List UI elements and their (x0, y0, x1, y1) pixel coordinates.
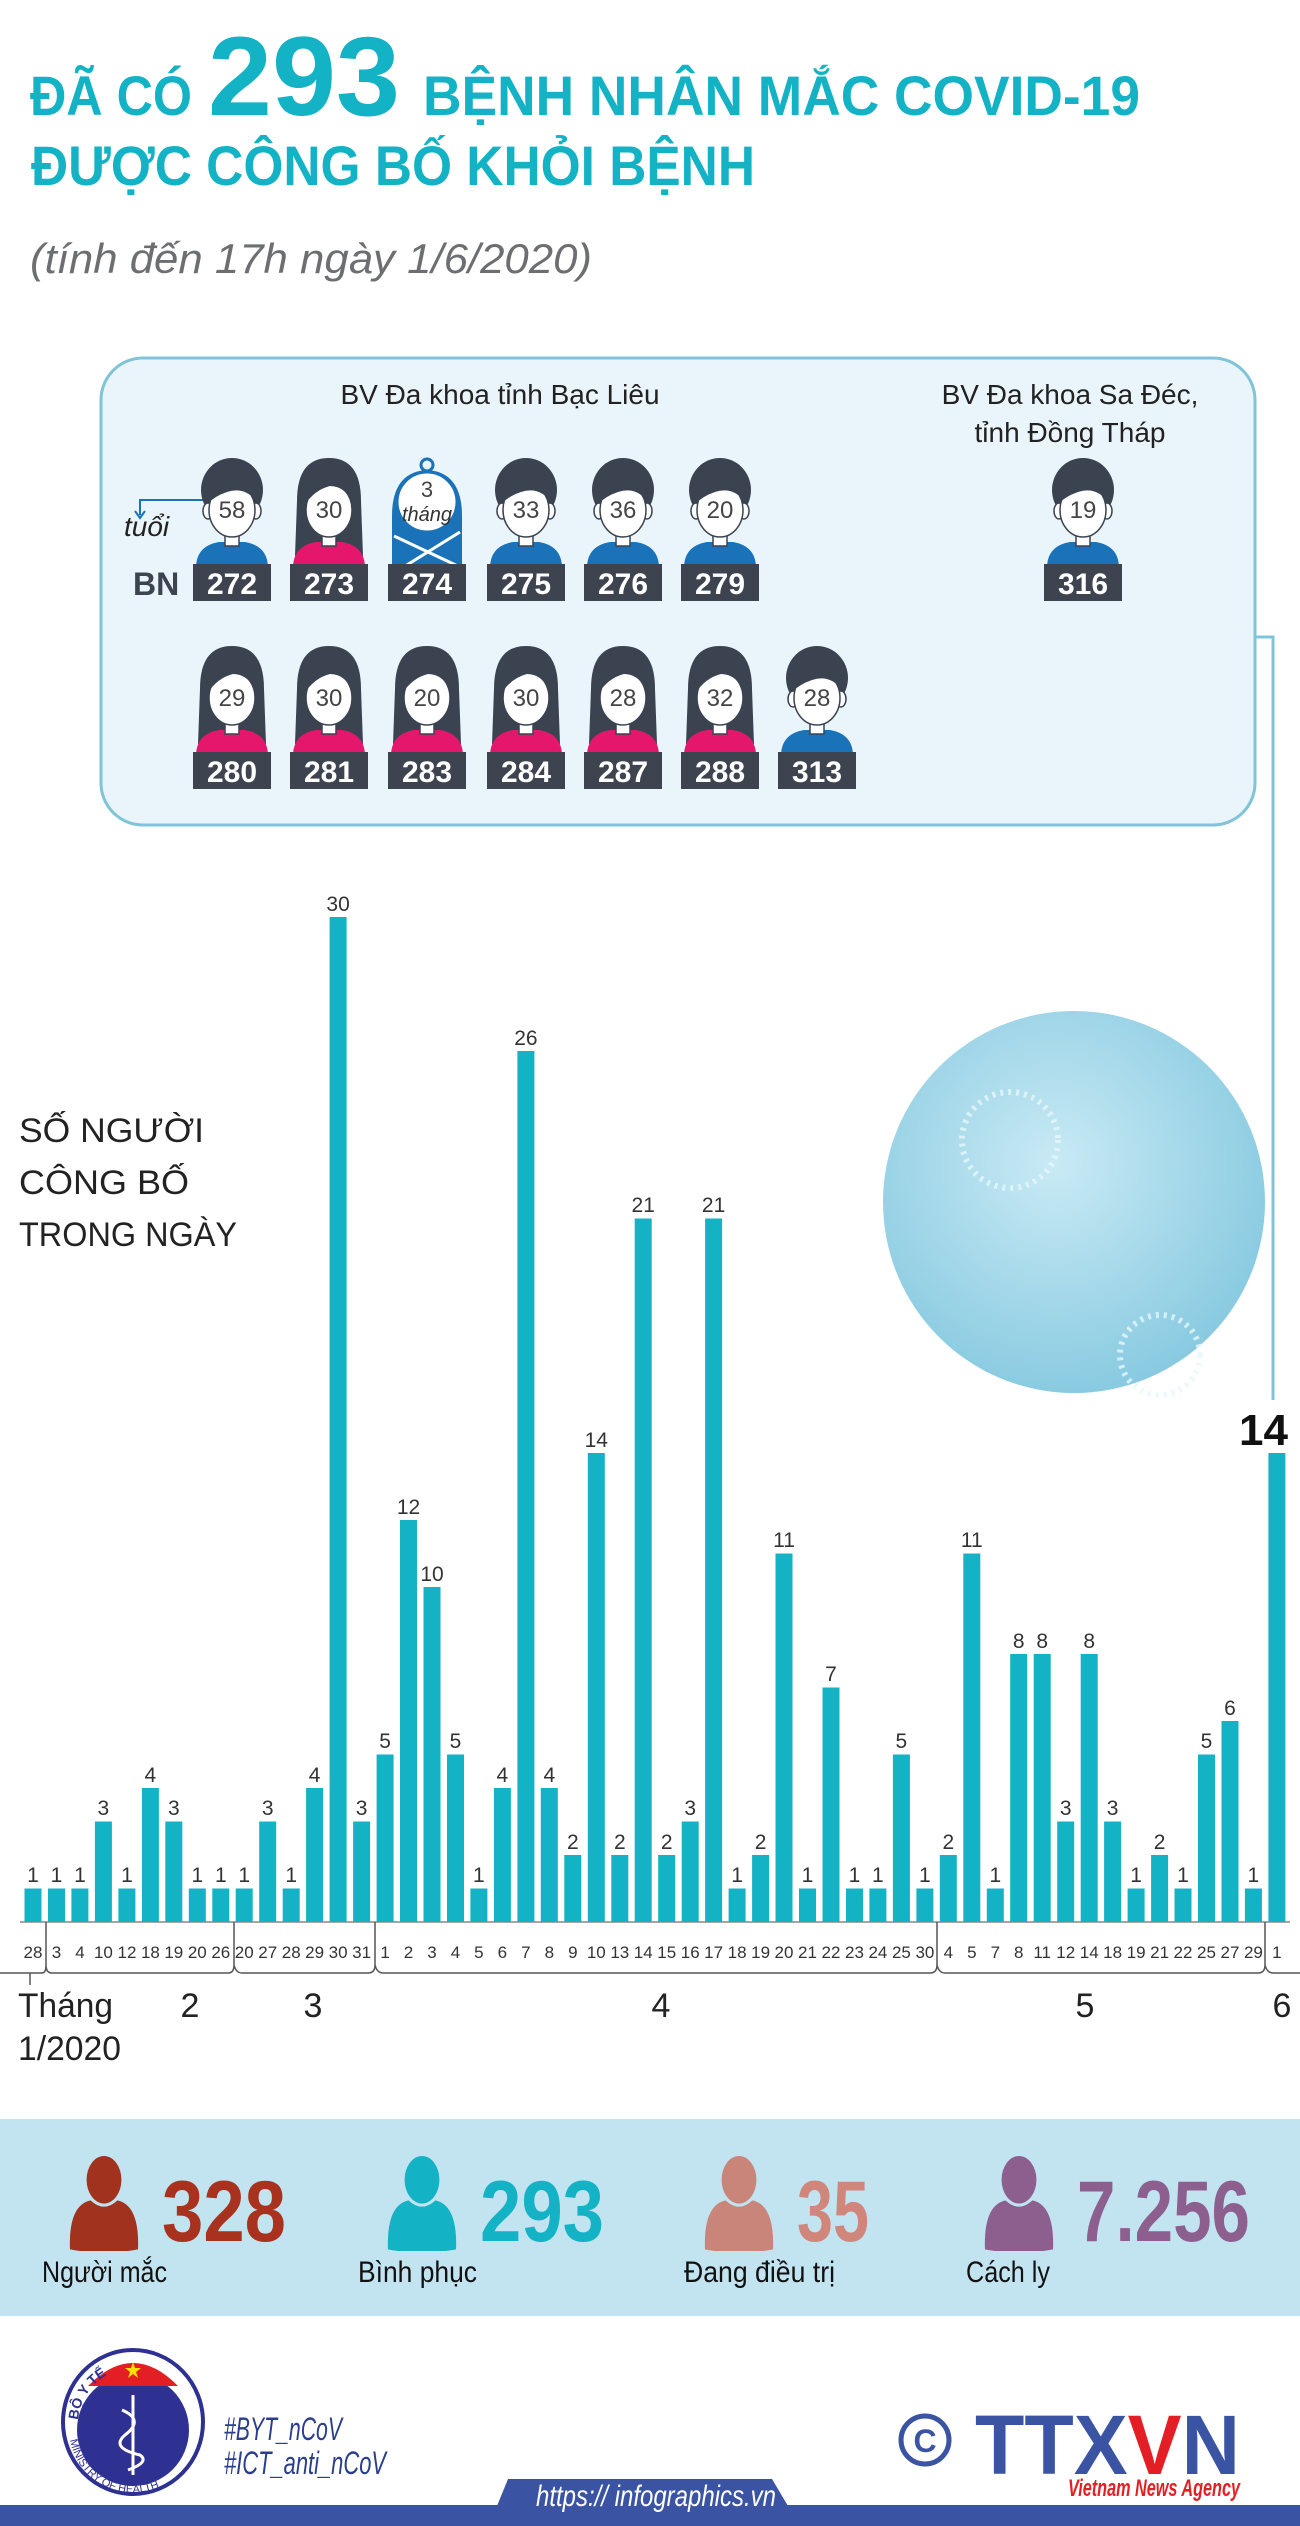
stat: bình phục: 293 (480, 2164, 604, 2260)
date labels: 21 (1150, 1943, 1169, 1962)
stat: cách ly (966, 2156, 1250, 2289)
bar value labels: 4 (145, 1764, 157, 1787)
date labels: 18 (728, 1943, 747, 1962)
bar value labels: 21 (702, 1194, 725, 1217)
bar value labels: 2 (942, 1831, 954, 1854)
bar value labels: 4 (543, 1764, 555, 1787)
date labels: 31 (352, 1943, 371, 1962)
bar value labels: 8 (1083, 1630, 1095, 1653)
stat: đang điều trị: 35 (797, 2164, 869, 2260)
logo: Ministry of Health: MINISTRY OF HEALTH (70, 2439, 158, 2492)
date labels (24, 1943, 1282, 1962)
month labels: 3 (304, 1987, 322, 2025)
date labels: 10 (94, 1943, 113, 1962)
date labels: 2 (404, 1943, 413, 1962)
bar value labels: 3 (684, 1797, 696, 1820)
date labels: 24 (868, 1943, 887, 1962)
person 272: 272 (207, 568, 257, 601)
stat: người mắc: Người mắc (42, 2256, 167, 2289)
person 280: 280 (207, 756, 257, 789)
bar value labels: 8 (1036, 1630, 1048, 1653)
bar value labels: 3 (262, 1797, 274, 1820)
bar value labels: 4 (497, 1764, 509, 1787)
date labels: 19 (1127, 1943, 1146, 1962)
bar value labels: 1 (919, 1864, 931, 1887)
bar value labels: 7 (825, 1663, 837, 1686)
bar value labels: 1 (215, 1864, 227, 1887)
bar value labels: 2 (755, 1831, 766, 1854)
date labels: 22 (822, 1943, 840, 1962)
bar value labels: 1 (51, 1864, 62, 1887)
title: BỆNH NHÂN MẮC COVID-19 (423, 64, 1140, 127)
date labels: 1 (380, 1943, 390, 1962)
person 283: 283 (402, 756, 452, 789)
person 272: 58 (219, 497, 245, 524)
bar value labels: 2 (614, 1831, 626, 1854)
date labels: 28 (24, 1943, 42, 1962)
date labels: 5 (967, 1943, 977, 1962)
stat: bình phục (358, 2156, 604, 2289)
bar value labels: 30 (326, 893, 350, 916)
date labels: 11 (1033, 1943, 1051, 1962)
bar value labels: 14 (585, 1429, 608, 1452)
title: ĐƯỢC CÔNG BỐ KHỎI BỆNH (31, 134, 755, 197)
bar value labels: 1 (238, 1864, 250, 1887)
person 276: 276 (598, 568, 648, 601)
person 275: 275 (501, 568, 551, 601)
month labels: Tháng (18, 1987, 113, 2025)
person 287: 28 (610, 685, 636, 712)
person 283 (388, 646, 466, 789)
date labels: 23 (845, 1943, 864, 1962)
title: 293 (208, 14, 400, 139)
date labels: 20 (775, 1943, 793, 1962)
logo: Ministry of Health (61, 2348, 205, 2496)
bar value labels: 8 (1013, 1630, 1025, 1653)
bar value labels: 1 (989, 1864, 1001, 1887)
person 273 (290, 458, 368, 601)
bar value labels: 1 (74, 1864, 86, 1887)
person 313: 28 (804, 685, 830, 712)
bar value labels: 1 (849, 1864, 860, 1887)
person 313 (778, 646, 856, 789)
legend: tuổi: tuổi (124, 511, 170, 542)
date labels: 28 (282, 1943, 301, 1962)
person 276: 36 (610, 497, 636, 524)
person 316: 316 (1058, 568, 1108, 601)
date labels: 27 (1221, 1943, 1239, 1962)
bar value labels: 1 (1177, 1864, 1189, 1887)
person 274 baby: tháng (402, 504, 452, 526)
subtitle: (tính đến 17h ngày 1/6/2020) (30, 235, 592, 282)
logo: TTXVN: TTXVN (975, 2398, 1240, 2492)
person 283: 20 (414, 685, 440, 712)
date labels: 8 (545, 1943, 554, 1962)
person 287 (584, 646, 662, 789)
footer bar (0, 2479, 1300, 2526)
date labels: 14 (1080, 1943, 1099, 1962)
hashtags: #BYT_nCoV (224, 2411, 344, 2447)
bar value labels: 2 (1154, 1831, 1165, 1854)
person 276 (584, 458, 662, 601)
person 288 (681, 646, 759, 789)
date labels: 20 (188, 1943, 207, 1962)
bar value labels: 14 (1239, 1406, 1289, 1455)
stat: bình phục: Bình phục (358, 2256, 477, 2289)
stat: đang điều trị (684, 2156, 869, 2289)
heading: Sa Dec hospital: tỉnh Đồng Tháp (975, 417, 1165, 448)
person 280 (193, 646, 271, 789)
date labels: 18 (1103, 1943, 1122, 1962)
bar value labels: 10 (420, 1563, 444, 1586)
date labels: 8 (1014, 1943, 1023, 1962)
date labels: 18 (141, 1943, 160, 1962)
logo: TTXVN: C (913, 2423, 937, 2459)
person 288: 32 (707, 685, 733, 712)
date labels: 12 (1056, 1943, 1075, 1962)
date labels: 13 (610, 1943, 629, 1962)
date labels: 4 (944, 1943, 953, 1962)
date labels: 26 (211, 1943, 230, 1962)
bar value labels: 5 (1201, 1730, 1212, 1753)
date labels: 27 (258, 1943, 277, 1962)
bar value labels: 3 (168, 1797, 180, 1820)
bar value labels: 1 (802, 1864, 813, 1887)
bar value labels: 2 (567, 1831, 579, 1854)
date labels: 21 (798, 1943, 817, 1962)
bar value labels: 5 (450, 1730, 461, 1753)
bar value labels: 2 (661, 1831, 673, 1854)
date labels: 9 (568, 1943, 578, 1962)
bar value labels: 3 (1060, 1797, 1072, 1820)
month labels: 5 (1076, 1987, 1094, 2025)
date labels: 29 (1244, 1943, 1263, 1962)
bar value labels: 11 (961, 1529, 983, 1552)
chart label: SỐ NGƯỜI (19, 1111, 204, 1150)
month labels: 1/2020 (18, 2030, 121, 2068)
date labels: 10 (587, 1943, 606, 1962)
date labels: 20 (235, 1943, 254, 1962)
date labels: 17 (704, 1943, 723, 1962)
bar value labels: 1 (872, 1864, 884, 1887)
person 281: 281 (304, 756, 354, 789)
bar value labels: 1 (27, 1864, 39, 1887)
panel: patients (101, 358, 1255, 825)
date labels: 3 (52, 1943, 61, 1962)
date labels: 14 (634, 1943, 653, 1962)
person 273: 30 (316, 497, 342, 524)
person 279: 279 (695, 568, 745, 601)
hashtags (224, 2411, 388, 2481)
person 288: 288 (695, 756, 745, 789)
person 274 baby (388, 459, 466, 601)
date labels: 16 (681, 1943, 700, 1962)
month brackets (0, 1922, 1300, 1973)
bar value labels: 1 (1130, 1864, 1142, 1887)
person 280: 29 (219, 685, 245, 712)
person 279 (681, 458, 759, 601)
bar value labels: 1 (121, 1864, 133, 1887)
bar value labels: 1 (473, 1864, 485, 1887)
date labels: 4 (451, 1943, 460, 1962)
bar value labels: 5 (379, 1730, 391, 1753)
date labels: 5 (474, 1943, 484, 1962)
date labels: 7 (521, 1943, 531, 1962)
person 279: 20 (707, 497, 733, 524)
bar value labels (27, 893, 1289, 1887)
bar value labels: 1 (285, 1864, 297, 1887)
chart label: TRONG NGÀY (19, 1216, 237, 1254)
person 273: 273 (304, 568, 354, 601)
heading: Sa Dec hospital: BV Đa khoa Sa Đéc, (942, 379, 1198, 410)
footer bar: https:// infographics.vn (536, 2480, 776, 2513)
month labels: 2 (181, 1987, 199, 2025)
date labels: 29 (305, 1943, 324, 1962)
legend: tuổi (124, 500, 205, 542)
person 316 (1044, 458, 1122, 601)
date labels: 22 (1174, 1943, 1192, 1962)
bar value labels: 6 (1224, 1697, 1236, 1720)
stat: cách ly: Cách ly (966, 2256, 1050, 2289)
hashtags: #ICT_anti_nCoV (224, 2445, 388, 2481)
icon: virus circle (883, 1011, 1265, 1395)
date labels: 1 (1272, 1943, 1282, 1962)
person 284 (487, 646, 565, 789)
person 275 (487, 458, 565, 601)
person 275: 33 (513, 497, 539, 524)
bar value labels: 26 (514, 1027, 538, 1050)
bar value labels: 4 (309, 1764, 321, 1787)
chart label: CÔNG BỐ (19, 1163, 189, 1202)
bar value labels: 3 (98, 1797, 109, 1820)
connector line from panel to last bar (1236, 637, 1273, 1400)
person 274 baby: 3 (421, 477, 433, 502)
bar value labels: 1 (1248, 1864, 1259, 1887)
stat: người mắc (42, 2156, 286, 2289)
date labels: 3 (427, 1943, 437, 1962)
heading: Bac Lieu hospital: BV Đa khoa tỉnh Bạc Liêu (340, 379, 660, 410)
bar value labels: 5 (896, 1730, 907, 1753)
date labels: 6 (498, 1943, 507, 1962)
bar value labels: 12 (397, 1496, 420, 1519)
person 284: 30 (513, 685, 539, 712)
month labels: 4 (652, 1987, 670, 2025)
person 316: 19 (1070, 497, 1096, 524)
date labels: 4 (75, 1943, 85, 1962)
date labels: 30 (915, 1943, 934, 1962)
date labels: 12 (118, 1943, 136, 1962)
bar value labels: 21 (632, 1194, 655, 1217)
date labels: 7 (991, 1943, 1000, 1962)
legend: BN: BN (133, 566, 179, 602)
bar chart (0, 893, 1300, 1985)
date labels: 19 (164, 1943, 183, 1962)
title: ĐÃ CÓ (30, 64, 192, 127)
bar value labels: 11 (773, 1529, 795, 1552)
bar value labels: 1 (731, 1864, 743, 1887)
date labels: 19 (751, 1943, 770, 1962)
month labels: 6 (1273, 1987, 1291, 2025)
stat: đang điều trị: Đang điều trị (684, 2256, 835, 2289)
stat: người mắc: 328 (162, 2164, 286, 2260)
person 274 baby: 274 (402, 568, 452, 601)
bar value labels: 1 (191, 1864, 203, 1887)
stat: cách ly: 7.256 (1077, 2164, 1250, 2260)
person 281 (290, 646, 368, 789)
month labels (18, 1987, 1291, 2068)
date labels: 15 (657, 1943, 676, 1962)
bar value labels: 3 (1107, 1797, 1118, 1820)
stats band (0, 2119, 1300, 2316)
bar value labels: 3 (356, 1797, 367, 1820)
person 287: 287 (598, 756, 648, 789)
person 272 (193, 458, 271, 601)
person 281: 30 (316, 685, 342, 712)
person 284: 284 (501, 756, 551, 789)
logo: Ministry of Health: BỘ Y TẾ (68, 2365, 106, 2420)
date labels: 25 (892, 1943, 911, 1962)
date labels: 25 (1197, 1943, 1216, 1962)
date labels: 30 (329, 1943, 348, 1962)
title (30, 14, 1140, 197)
person 313: 313 (792, 756, 842, 789)
